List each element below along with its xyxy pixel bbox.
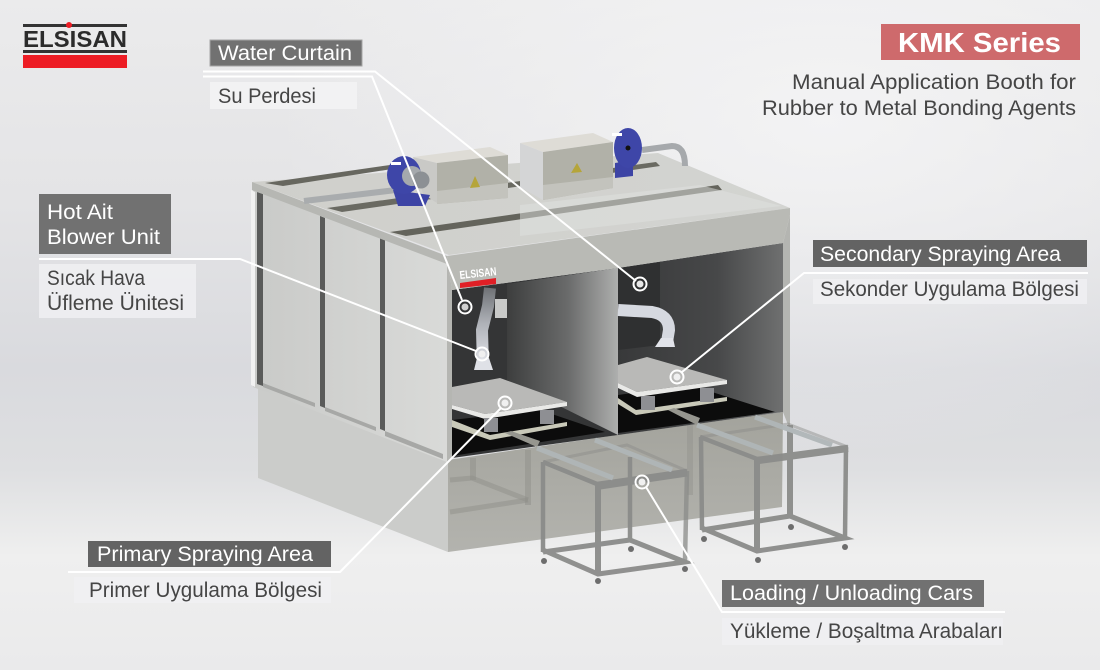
right fan bbox=[612, 128, 642, 178]
callout: Secondary Spraying Area: Sekonder Uygulama Bölgesi bbox=[820, 277, 1079, 301]
callout: Primary Spraying Area bbox=[68, 396, 512, 603]
callout: Hot Air Blower Unit: Blower Unit bbox=[47, 225, 160, 249]
right chamber bbox=[618, 243, 783, 435]
subtitle bbox=[762, 70, 1076, 120]
trays bbox=[452, 357, 727, 447]
booth logo: ELSISAN bbox=[459, 266, 497, 282]
booth logo bbox=[459, 266, 497, 288]
pipes bbox=[304, 146, 685, 201]
side panels bbox=[251, 186, 447, 462]
front band bbox=[447, 208, 790, 462]
top plate bbox=[252, 153, 790, 264]
callout: Secondary Spraying Area: Secondary Spraying Area bbox=[820, 242, 1061, 266]
logo: Elsisan bbox=[23, 22, 127, 68]
ducts bbox=[474, 288, 675, 370]
subtitle: Rubber to Metal Bonding Agents bbox=[762, 96, 1076, 120]
callout: Hot Air Blower Unit: Üfleme Ünitesi bbox=[47, 291, 184, 315]
cart wheels bbox=[541, 524, 848, 584]
callout: Hot Air Blower Unit: Hot Ait bbox=[47, 200, 113, 224]
left chamber bbox=[452, 268, 618, 458]
badge: KMK Series bbox=[881, 24, 1080, 60]
callout: Water Curtain: Su Perdesi bbox=[218, 84, 316, 108]
callout: Primary Spraying Area: Primary Spraying Area bbox=[97, 542, 313, 566]
left fan bbox=[387, 156, 430, 206]
subtitle: Manual Application Booth for bbox=[792, 70, 1076, 94]
callout: Hot Air Blower Unit bbox=[39, 194, 488, 360]
callout: Water Curtain bbox=[203, 40, 646, 314]
cart 1 bbox=[537, 440, 687, 574]
blower box 1 bbox=[413, 147, 508, 204]
callout: Loading / Unloading Cars bbox=[636, 476, 1005, 645]
callout: Primary Spraying Area: Primer Uygulama Bölgesi bbox=[89, 578, 322, 602]
booth base bbox=[258, 386, 783, 552]
logo: Elsisan: ELSISAN bbox=[23, 26, 127, 52]
callout: Secondary Spraying Area bbox=[670, 240, 1088, 384]
callout: Water Curtain: Water Curtain bbox=[218, 41, 352, 65]
booth machine bbox=[251, 128, 790, 552]
callout: Loading / Unloading Cars: Yükleme / Boşaltma Arabaları bbox=[730, 619, 1003, 643]
cart 2 bbox=[697, 417, 848, 552]
blower box 2 bbox=[520, 133, 613, 200]
badge: KMK Series: KMK Series bbox=[898, 27, 1061, 58]
callout: Loading / Unloading Cars: Loading / Unloading Cars bbox=[730, 581, 973, 605]
callout: Hot Air Blower Unit: Sıcak Hava bbox=[47, 266, 145, 290]
